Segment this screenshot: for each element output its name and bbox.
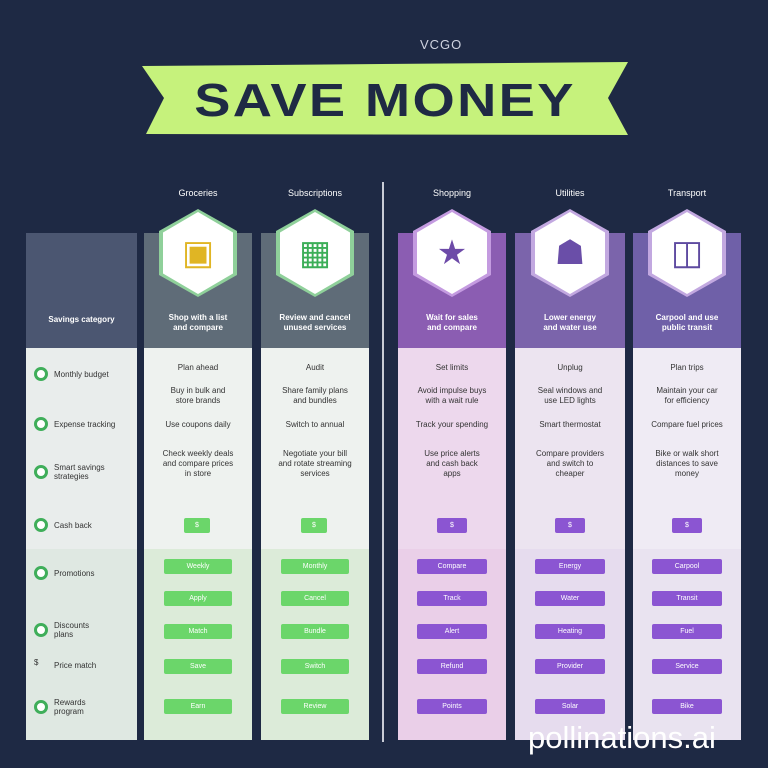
panel: label column: Rewards <box>54 698 86 707</box>
icon: box: ◫ <box>671 234 703 272</box>
panel: column 2 green: Audit <box>306 363 324 372</box>
panel: label column: Expense tracking <box>54 420 115 428</box>
panel: label column: $ <box>34 658 38 667</box>
panel: column 2 green <box>261 188 369 740</box>
icon: calendar <box>280 212 350 294</box>
subtitle: VCGO <box>420 37 462 52</box>
panel: column 3 purple: Use price alerts <box>424 449 480 458</box>
icon: star <box>417 212 487 294</box>
panel: column 4 purple: Smart thermostat <box>539 420 601 429</box>
panel: column 2 green: Review <box>304 703 326 710</box>
panel: column 2 green: and bundles <box>293 396 337 405</box>
panel: column 4 purple: Energy <box>559 563 581 570</box>
panel: column 3 purple: Alert <box>445 628 459 635</box>
panel: column 3 purple: Avoid impulse buys <box>418 386 486 395</box>
panel: column 1 green: Use coupons daily <box>165 420 231 429</box>
panel: column 5 purple: distances to save <box>656 459 718 468</box>
panel: column 1 green: Plan ahead <box>178 363 218 372</box>
panel: column 2 green: Monthly <box>303 563 327 570</box>
text: Shopping <box>433 188 471 198</box>
title banner <box>142 62 628 135</box>
panel: column 1 green: Earn <box>191 703 205 710</box>
panel: column 5 purple: Plan trips <box>670 363 704 372</box>
panel: column 5 purple: for efficiency <box>665 396 709 405</box>
icon: house <box>535 212 605 294</box>
panel: column 4 purple: Lower energy <box>544 313 596 322</box>
icon: star: ★ <box>437 234 467 272</box>
panel: column 3 purple: $ <box>450 522 454 529</box>
panel: column 1 green: Match <box>188 628 208 635</box>
panel: label column: Promotions <box>54 568 94 578</box>
panel: column 3 purple: Refund <box>441 663 463 670</box>
watermark: pollinations.ai <box>528 720 716 755</box>
panel: column 2 green: Bundle <box>304 628 326 635</box>
panel: column 2 green: services <box>300 469 330 478</box>
panel: label column: Price match <box>54 660 96 670</box>
panel: column 2 green: Switch <box>305 663 325 670</box>
panel: column 1 green: Apply <box>189 595 207 602</box>
panel: column 3 purple: and compare <box>427 323 477 332</box>
panel: column 2 green: Negotiate your bill <box>283 449 347 458</box>
panel: column 4 purple: Solar <box>562 703 578 710</box>
panel: column 5 purple: Service <box>675 663 699 670</box>
panel: label column: plans <box>54 630 73 639</box>
panel: column 5 purple: Fuel <box>680 628 694 635</box>
panel: column 4 purple: cheaper <box>556 469 584 478</box>
panel: column 5 purple: Bike or walk short <box>655 449 719 458</box>
panel: column 4 purple: use LED lights <box>544 396 596 405</box>
panel: column 3 purple: apps <box>443 469 461 478</box>
panel: column 3 purple <box>398 188 506 740</box>
text: Groceries <box>178 188 218 198</box>
panel: column 2 green: Switch to annual <box>286 420 344 429</box>
panel: column 1 green: and compare prices <box>163 459 233 468</box>
panel: label column: Monthly budget <box>54 370 109 378</box>
text: Utilities <box>555 188 584 198</box>
panel: column 1 green: Shop with a list <box>169 313 227 322</box>
text: Subscriptions <box>288 188 342 198</box>
panel: column 4 purple: Seal windows and <box>538 386 602 395</box>
panel: label column: program <box>54 707 84 716</box>
panel: column 1 green: in store <box>185 469 211 478</box>
panel: column 4 purple: Compare providers <box>536 449 604 458</box>
panel: column 5 purple: public transit <box>662 323 712 332</box>
panel: label column: Savings category <box>48 315 115 324</box>
panel: column 1 green: Save <box>190 663 206 670</box>
panel: column 3 purple: Track <box>443 595 461 602</box>
panel: column 3 purple: Compare <box>438 563 466 570</box>
panel: column 5 purple: $ <box>685 522 689 529</box>
panel: column 2 green: Cancel <box>304 595 326 602</box>
panel: column 5 purple <box>633 188 741 740</box>
panel: column 3 purple: Wait for sales <box>426 313 478 322</box>
panel: column 4 purple: $ <box>568 522 572 529</box>
panel: column 2 green: and rotate streaming <box>278 459 352 468</box>
panel: column 3 purple: Set limits <box>436 363 468 372</box>
panel: label column: strategies <box>54 472 89 481</box>
panel: column 2 green: Review and cancel <box>279 313 351 322</box>
panel: column 1 green: Buy in bulk and <box>171 386 225 395</box>
panel: column 4 purple: Heating <box>558 628 582 635</box>
panel: column 1 green <box>144 188 252 740</box>
text: Transport <box>668 188 706 198</box>
panel: column 2 green: $ <box>312 522 316 529</box>
icon: house: ☗ <box>555 234 585 272</box>
panel: label column: Discounts <box>54 621 89 630</box>
panel: column 4 purple: Water <box>561 595 579 602</box>
panel: column 3 purple: Track your spending <box>416 420 488 429</box>
panel: column 2 green: unused services <box>284 323 346 332</box>
panel: column 4 purple <box>515 188 625 740</box>
panel: column 5 purple: Compare fuel prices <box>651 420 723 429</box>
icon: box <box>652 212 722 294</box>
panel: column 5 purple: money <box>675 469 699 478</box>
panel: column 4 purple: and switch to <box>547 459 593 468</box>
panel: label column: Cash back <box>54 520 92 530</box>
title: SAVE MONEY <box>194 74 576 126</box>
divider <box>382 182 384 742</box>
panel: column 4 purple: Unplug <box>557 363 583 372</box>
icon: coin stack <box>163 212 233 294</box>
panel: column 4 purple: Provider <box>557 663 583 670</box>
panel: column 1 green: $ <box>195 522 199 529</box>
panel: column 1 green: Check weekly deals <box>163 449 233 458</box>
panel: column 3 purple: with a wait rule <box>426 396 478 405</box>
panel: column 5 purple: Carpool and use <box>656 313 718 322</box>
panel: column 3 purple: and cash back <box>426 459 478 468</box>
panel: column 4 purple: and water use <box>543 323 597 332</box>
panel: label column <box>26 233 137 740</box>
panel: column 5 purple: Maintain your car <box>656 386 718 395</box>
icon: coin stack: ▣ <box>182 234 214 272</box>
panel: column 5 purple: Bike <box>680 703 694 710</box>
panel: column 5 purple: Carpool <box>675 563 699 570</box>
panel: column 1 green: Weekly <box>187 563 209 570</box>
panel: column 1 green: store brands <box>176 396 220 405</box>
panel: column 1 green: and compare <box>173 323 223 332</box>
panel: column 2 green: Share family plans <box>282 386 348 395</box>
icon: calendar: ▦ <box>299 234 331 272</box>
panel: column 5 purple: Transit <box>676 595 698 602</box>
panel: label column: Smart savings <box>54 463 105 472</box>
panel: column 3 purple: Points <box>442 703 462 710</box>
